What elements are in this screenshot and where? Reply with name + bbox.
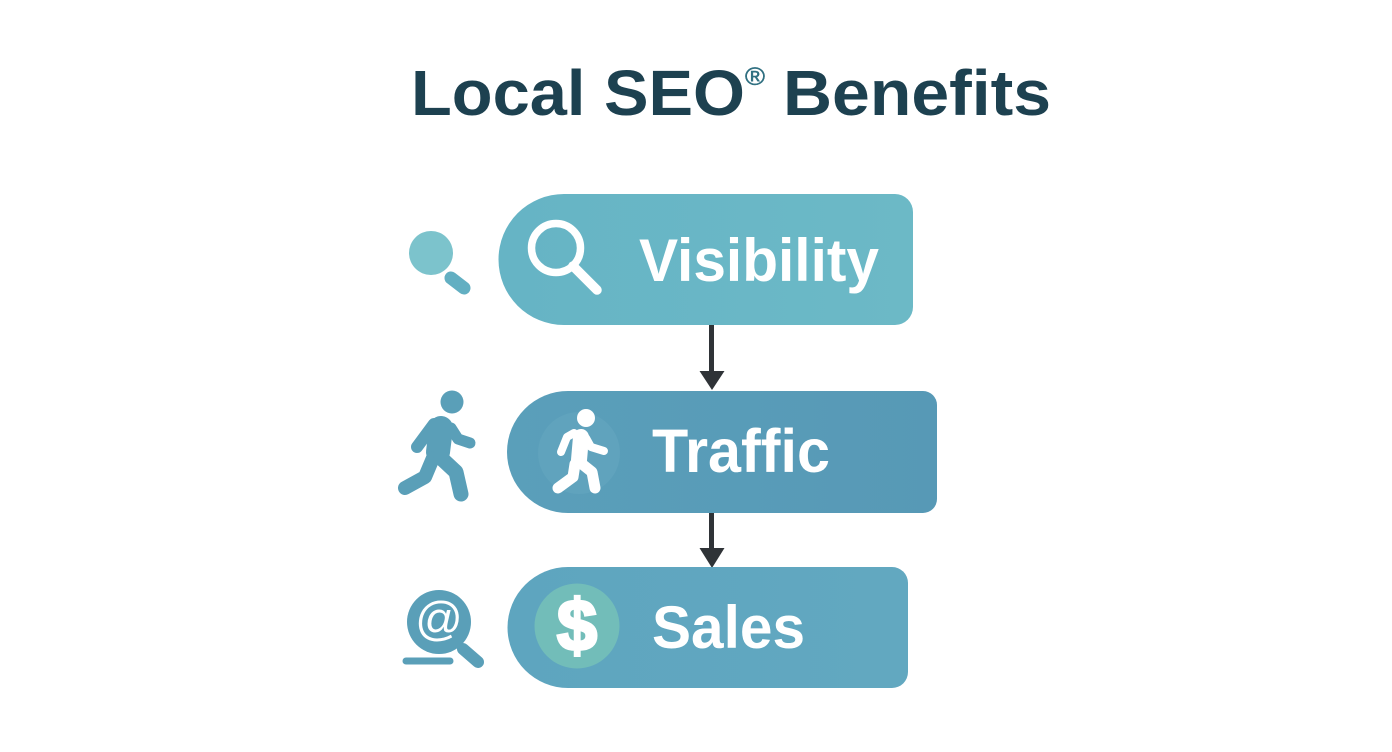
- label: visibility: Visibility: [639, 227, 880, 294]
- label: sales: Sales: [652, 594, 805, 661]
- icon: at-sign magnifier: @: [415, 592, 463, 645]
- panel: visibility: [498, 194, 913, 325]
- icon: dollar coin: [534, 584, 620, 668]
- label: traffic: Traffic: [652, 417, 830, 485]
- icon: visibility magnifier: [532, 224, 597, 290]
- arrow: visibility to traffic: [700, 325, 724, 390]
- icon: at-sign magnifier: [406, 590, 478, 662]
- icon: traffic runner in circle: [538, 409, 620, 494]
- title: [411, 57, 1051, 129]
- arrow: traffic to sales: [700, 513, 724, 568]
- title: ®: [745, 63, 766, 91]
- title: Benefits: [783, 57, 1051, 129]
- panel: sales: [508, 567, 908, 688]
- title: Local SEO: [411, 57, 745, 129]
- icon: left magnifier: [409, 231, 464, 288]
- panel: traffic: [507, 391, 937, 513]
- icon: dollar coin: $: [557, 586, 597, 666]
- icon: left runner: [405, 390, 470, 494]
